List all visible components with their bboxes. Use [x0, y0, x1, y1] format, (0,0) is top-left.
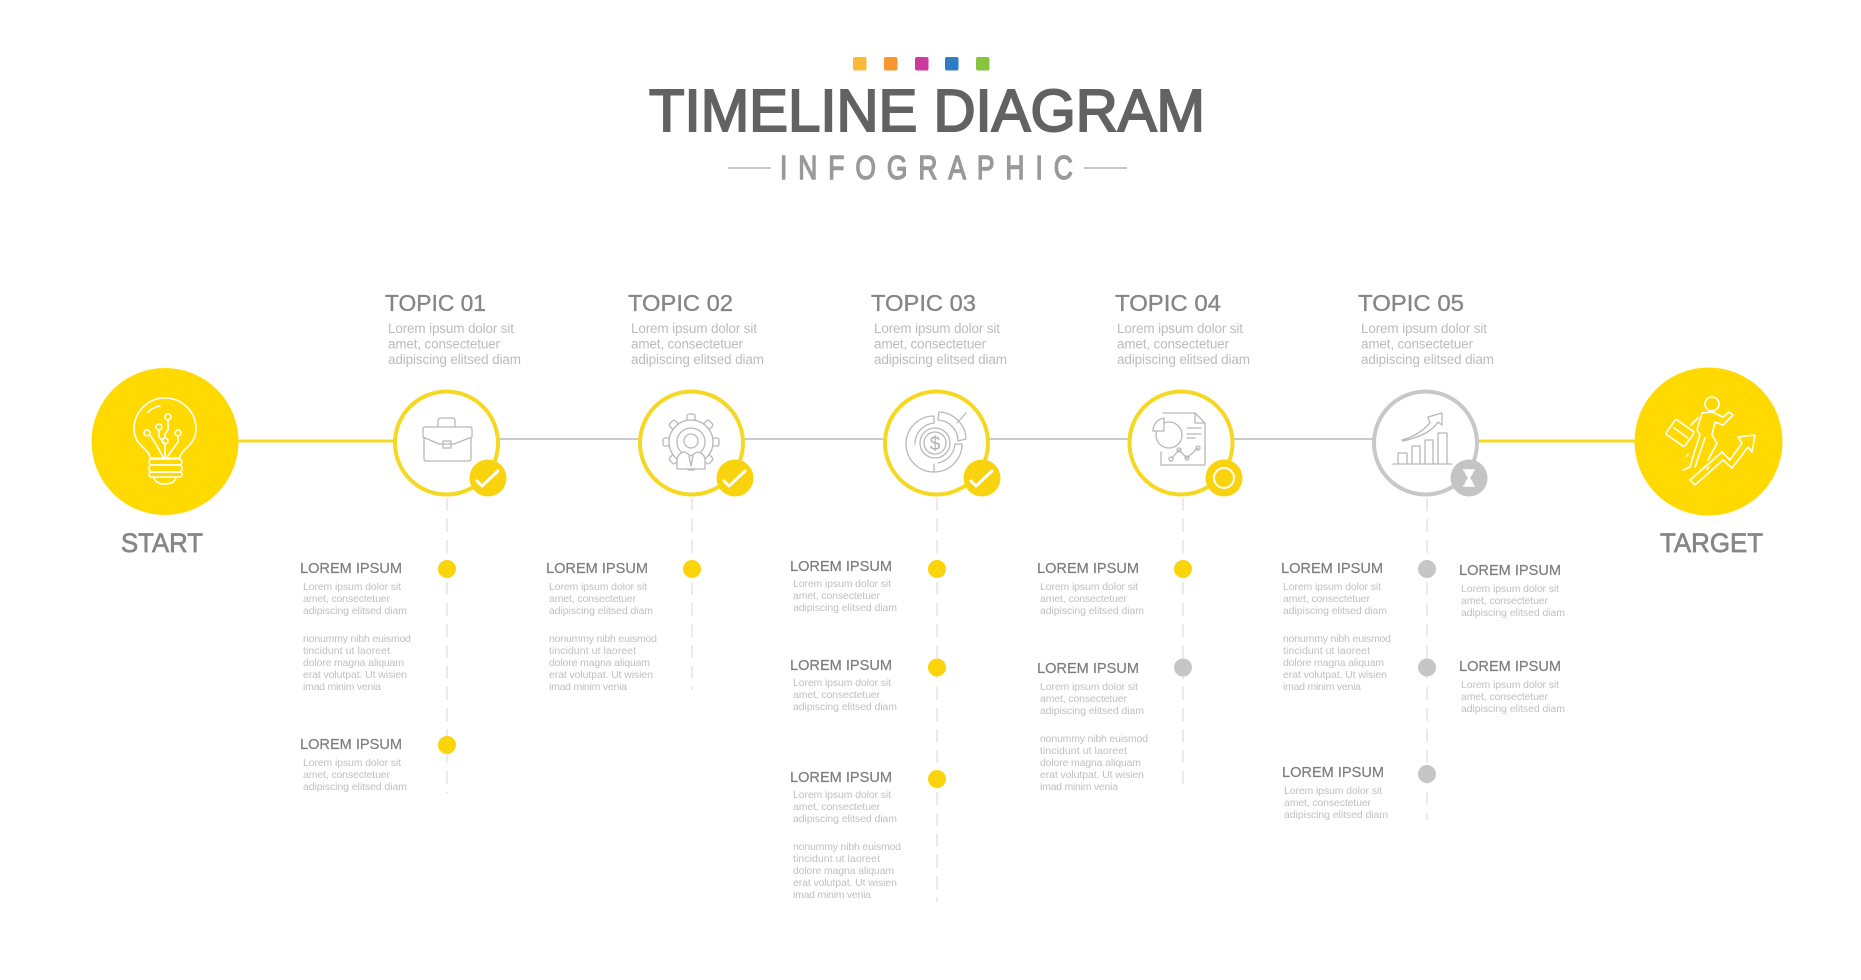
- badge: check: [470, 460, 506, 496]
- item 1: erat volutpat. Ut wisien: [549, 669, 653, 681]
- description: [631, 321, 764, 367]
- right item 1: [1459, 562, 1565, 619]
- icon: growth chart: [1393, 413, 1452, 464]
- left item 1: tincidunt ut laoreet: [1283, 645, 1370, 657]
- milestone circle: [395, 392, 498, 494]
- description: amet, consectetuer: [1117, 336, 1230, 352]
- description: amet, consectetuer: [388, 336, 500, 352]
- item 1: tincidunt ut laoreet: [549, 645, 636, 657]
- item 2: Lorem ipsum dolor sit: [793, 677, 891, 689]
- heading: TOPIC 03: [871, 290, 976, 316]
- item 1: amet, consectetuer: [1040, 593, 1128, 605]
- column 1 details: [300, 560, 456, 793]
- item 1: LOREM IPSUM: [790, 558, 892, 575]
- item 3: adipiscing elitsed diam: [793, 813, 897, 825]
- topic 04: [1115, 290, 1250, 496]
- dots: [438, 560, 456, 754]
- item 1: amet, consectetuer: [549, 593, 636, 605]
- right item 2: LOREM IPSUM: [1459, 658, 1561, 675]
- item 2: Lorem ipsum dolor sit: [1040, 681, 1138, 693]
- description: Lorem ipsum dolor sit: [1117, 321, 1243, 336]
- icon: donut chart with dollar: $: [930, 434, 941, 455]
- topic 01: [385, 290, 521, 496]
- left item 1: Lorem ipsum dolor sit: [1283, 581, 1381, 593]
- icon: light bulb: [134, 398, 196, 484]
- item 2: tincidunt ut laoreet: [1040, 745, 1127, 757]
- right item 2: amet, consectetuer: [1461, 691, 1548, 703]
- heading: TOPIC 02: [628, 290, 733, 316]
- item 2: [790, 657, 897, 713]
- description: [1117, 321, 1250, 367]
- column 3 details: [790, 558, 946, 901]
- column 2 details: [546, 560, 701, 693]
- item 1: [546, 560, 657, 693]
- item 2: adipiscing elitsed diam: [793, 701, 897, 713]
- dots: [1174, 560, 1192, 676]
- label: start: START: [121, 528, 203, 558]
- milestone circle: [1130, 392, 1232, 494]
- item 1: LOREM IPSUM: [546, 560, 648, 577]
- item 3: nonummy nibh euismod: [793, 841, 901, 853]
- item 1: adipiscing elitsed diam: [1040, 605, 1144, 617]
- item 1: imad minim venia: [303, 681, 381, 693]
- description: amet, consectetuer: [1361, 336, 1474, 352]
- description: adipiscing elitsed diam: [1361, 352, 1494, 367]
- subtitle: INFOGRAPHIC: [780, 150, 1073, 187]
- left item 2: Lorem ipsum dolor sit: [1284, 785, 1382, 797]
- item 2: amet, consectetuer: [303, 769, 390, 781]
- column 5 details: [1281, 560, 1565, 821]
- description: [1361, 321, 1494, 367]
- start node: [92, 368, 238, 558]
- description: [874, 321, 1007, 367]
- item 2: adipiscing elitsed diam: [303, 781, 407, 793]
- item 3: dolore magna aliquam: [793, 865, 894, 877]
- item 1: amet, consectetuer: [793, 590, 880, 602]
- column 4 details: [1037, 560, 1192, 793]
- dot: [683, 560, 701, 578]
- item 1: erat volutpat. Ut wisien: [303, 669, 407, 681]
- icon: donut chart with dollar: [906, 412, 966, 472]
- item 2: amet, consectetuer: [793, 689, 880, 701]
- description: amet, consectetuer: [874, 336, 986, 352]
- topic 05: [1358, 290, 1494, 496]
- left item 2: LOREM IPSUM: [1282, 764, 1384, 781]
- item 3: imad minim venia: [793, 889, 871, 901]
- left item 1: amet, consectetuer: [1283, 593, 1370, 605]
- item 3: [790, 769, 901, 901]
- item 1: Lorem ipsum dolor sit: [303, 581, 401, 593]
- item 1: dolore magna aliquam: [549, 657, 650, 669]
- left item 2: amet, consectetuer: [1284, 797, 1372, 809]
- left item 2: adipiscing elitsed diam: [1284, 809, 1388, 821]
- left item 1: [1281, 560, 1391, 693]
- item 2: LOREM IPSUM: [790, 657, 892, 674]
- item 1: [300, 560, 411, 693]
- item 1: nonummy nibh euismod: [303, 633, 411, 645]
- item 1: imad minim venia: [549, 681, 627, 693]
- right item 2: [1459, 658, 1565, 715]
- description: Lorem ipsum dolor sit: [388, 321, 514, 336]
- connector lines: [238, 439, 1636, 441]
- item 1: adipiscing elitsed diam: [303, 605, 407, 617]
- left item 1: dolore magna aliquam: [1283, 657, 1384, 669]
- right item 1: adipiscing elitsed diam: [1461, 607, 1565, 619]
- item 2: nonummy nibh euismod: [1040, 733, 1148, 745]
- item 3: erat volutpat. Ut wisien: [793, 877, 897, 889]
- item 2: [300, 736, 407, 793]
- icon: runner with arrow: [1665, 397, 1755, 485]
- milestone circle: [885, 392, 988, 494]
- badge: check: [716, 460, 754, 496]
- item 2: dolore magna aliquam: [1040, 757, 1141, 769]
- right item 1: LOREM IPSUM: [1459, 562, 1561, 579]
- item 3: LOREM IPSUM: [790, 769, 892, 786]
- target node: [1634, 368, 1782, 558]
- colour squares: [853, 57, 990, 70]
- item 1: [790, 558, 897, 614]
- item 1: Lorem ipsum dolor sit: [549, 581, 647, 593]
- icon: report document: [1153, 413, 1205, 465]
- item 1: adipiscing elitsed diam: [793, 602, 897, 614]
- icon: gear with person: [663, 414, 719, 470]
- item 2: Lorem ipsum dolor sit: [303, 757, 401, 769]
- badge: hourglass: [1450, 460, 1488, 496]
- item 1: LOREM IPSUM: [300, 560, 402, 577]
- description: Lorem ipsum dolor sit: [1361, 321, 1487, 336]
- description: adipiscing elitsed diam: [631, 352, 764, 367]
- milestone circle: [640, 392, 743, 494]
- item 2: erat volutpat. Ut wisien: [1040, 769, 1144, 781]
- label: target: TARGET: [1660, 528, 1763, 558]
- item 1: dolore magna aliquam: [303, 657, 404, 669]
- right item 2: adipiscing elitsed diam: [1461, 703, 1565, 715]
- item 2: [1037, 660, 1148, 793]
- item 1: adipiscing elitsed diam: [549, 605, 653, 617]
- heading: TOPIC 01: [385, 290, 486, 316]
- badge: in progress: [1206, 460, 1242, 496]
- item 1: [1037, 560, 1144, 617]
- item 2: adipiscing elitsed diam: [1040, 705, 1144, 717]
- heading: TOPIC 05: [1358, 290, 1464, 316]
- description: adipiscing elitsed diam: [388, 352, 521, 367]
- item 3: Lorem ipsum dolor sit: [793, 789, 891, 801]
- left item 1: imad minim venia: [1283, 681, 1361, 693]
- left item 1: erat volutpat. Ut wisien: [1283, 669, 1387, 681]
- description: amet, consectetuer: [631, 336, 744, 352]
- left item 1: LOREM IPSUM: [1281, 560, 1383, 577]
- topic 02: [628, 290, 764, 496]
- item 1: Lorem ipsum dolor sit: [1040, 581, 1138, 593]
- right item 1: amet, consectetuer: [1461, 595, 1548, 607]
- topic 03: [871, 290, 1007, 496]
- item 2: LOREM IPSUM: [300, 736, 402, 753]
- item 1: LOREM IPSUM: [1037, 560, 1139, 577]
- left item 2: [1282, 764, 1388, 821]
- description: Lorem ipsum dolor sit: [631, 321, 757, 336]
- description: Lorem ipsum dolor sit: [874, 321, 1000, 336]
- item 3: tincidunt ut laoreet: [793, 853, 880, 865]
- description: adipiscing elitsed diam: [1117, 352, 1250, 367]
- item 2: imad minim venia: [1040, 781, 1118, 793]
- badge: check: [964, 460, 1000, 496]
- right item 1: Lorem ipsum dolor sit: [1461, 583, 1559, 595]
- item 2: amet, consectetuer: [1040, 693, 1128, 705]
- description: adipiscing elitsed diam: [874, 352, 1007, 367]
- right item 2: Lorem ipsum dolor sit: [1461, 679, 1559, 691]
- dashed drop lines: [447, 498, 1427, 902]
- left item 1: adipiscing elitsed diam: [1283, 605, 1387, 617]
- item 1: nonummy nibh euismod: [549, 633, 657, 645]
- dots: [928, 560, 946, 788]
- item 3: amet, consectetuer: [793, 801, 880, 813]
- icon: briefcase: [423, 418, 472, 461]
- item 1: tincidunt ut laoreet: [303, 645, 390, 657]
- title: TIMELINE DIAGRAM: [649, 78, 1205, 144]
- left item 1: nonummy nibh euismod: [1283, 633, 1391, 645]
- milestone circle: [1374, 392, 1477, 494]
- heading: TOPIC 04: [1115, 290, 1221, 316]
- item 2: LOREM IPSUM: [1037, 660, 1139, 677]
- item 1: Lorem ipsum dolor sit: [793, 578, 891, 590]
- description: [388, 321, 521, 367]
- item 1: amet, consectetuer: [303, 593, 390, 605]
- dots: [1418, 560, 1436, 783]
